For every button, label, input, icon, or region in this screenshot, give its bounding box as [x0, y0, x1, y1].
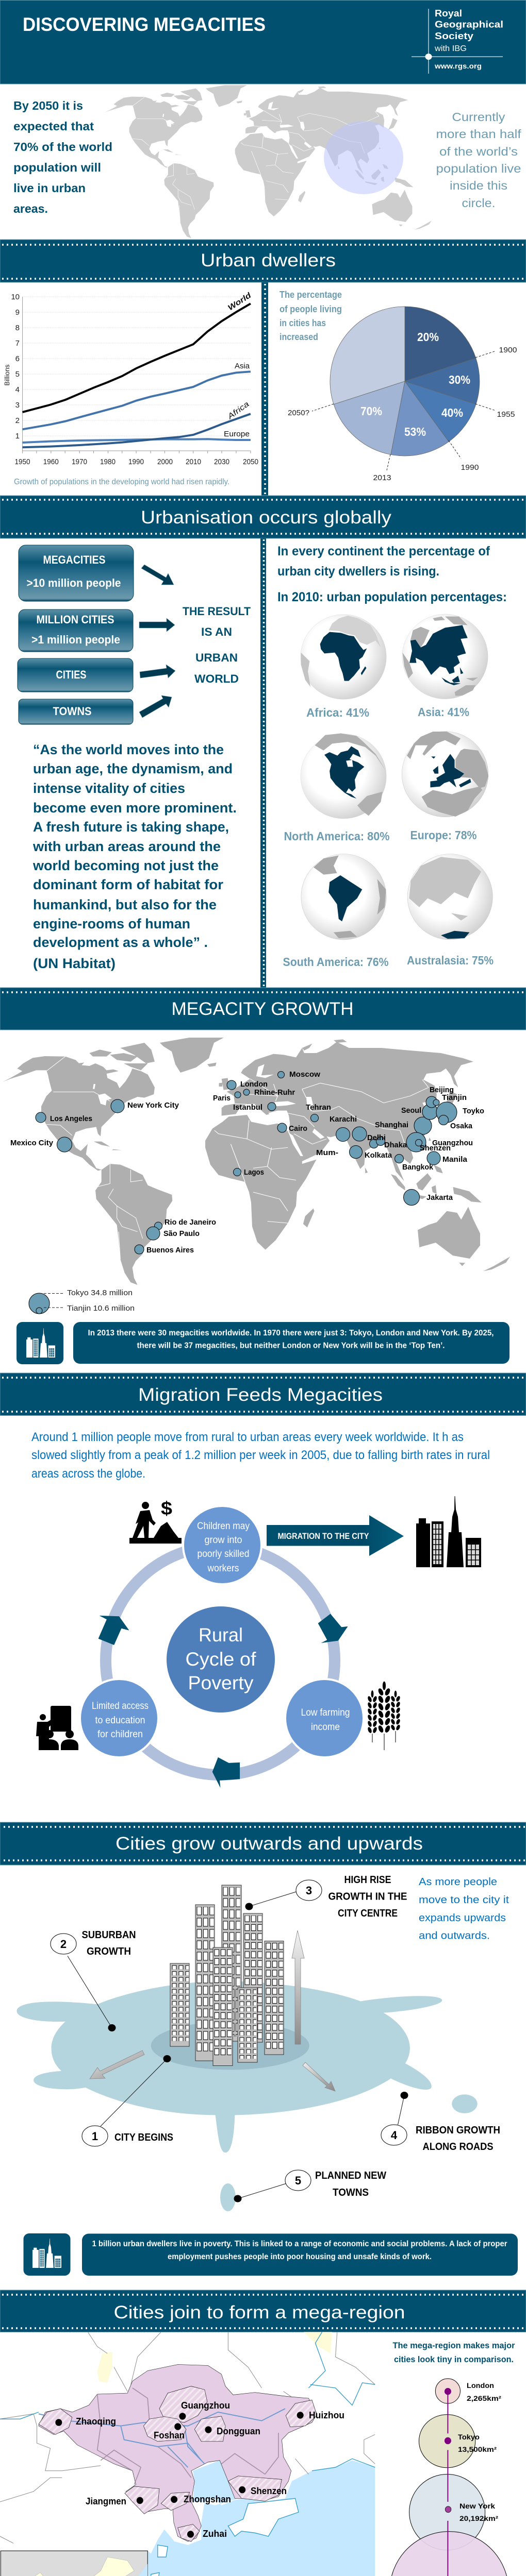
y axis labels: 3	[15, 401, 20, 410]
title: DISCOVERING MEGACITIES	[23, 14, 266, 35]
globe labels: Africa: 41%	[306, 706, 369, 719]
logo: Royal Geographical Society: www.rgs.org	[434, 62, 482, 70]
arrows to urban world	[139, 565, 175, 718]
city labels: Guangzhou	[432, 1139, 473, 1147]
section heading: Urban dwellers	[0, 240, 526, 282]
text: by 2050 statement: By 2050 it is	[13, 99, 83, 112]
icon: wheat	[367, 1682, 401, 1750]
text: rural to urban migration	[31, 1430, 490, 1481]
text: currently more than half: more than half	[436, 127, 521, 141]
text: rural to urban migration: slowed slightly from a peak of 1.2 million per week in 2005, due to falling birth rates in rural	[31, 1448, 490, 1462]
node: limited access to education: for children	[97, 1729, 143, 1740]
x axis labels: 2030	[214, 457, 229, 466]
node: limited access to education	[79, 1678, 159, 1758]
neighbouring land details	[97, 2332, 332, 2383]
city labels: Shenzen	[420, 1144, 451, 1153]
city labels: Seoul	[401, 1106, 421, 1115]
text: every continent: urban city dwellers is rising.	[277, 564, 439, 579]
pie chart: percentage living in cities: 2013	[373, 473, 391, 482]
stage labels: RIBBON GROWTH	[416, 2125, 500, 2136]
icon: teacher and pupils	[36, 1706, 78, 1750]
node: poorly skilled workers: workers	[207, 1563, 239, 1574]
y axis labels: 1	[15, 432, 20, 440]
globe labels: South America: 76%	[283, 955, 389, 969]
comparison circles	[390, 2379, 508, 2576]
city labels: Buenos Aires	[146, 1246, 194, 1255]
city circles	[36, 1072, 457, 1254]
city names	[76, 2400, 344, 2539]
text: rural to urban migration: areas across the globe.	[31, 1467, 145, 1481]
legend: circle sizes	[29, 1289, 135, 1314]
node: limited access to education: Limited access	[92, 1701, 149, 1711]
text: as more people move: expands upwards	[419, 1912, 506, 1924]
text: the result is an urban world	[183, 605, 251, 685]
text: pie chart intro	[280, 290, 342, 342]
text: pie chart intro: The percentage	[280, 290, 342, 300]
box: megacities	[19, 545, 134, 601]
world map with population circle	[104, 85, 432, 238]
box: megacities: >10 million people	[27, 577, 121, 589]
callout: 30 megacities	[73, 1322, 509, 1364]
sea	[147, 2461, 375, 2576]
city labels: Rhine-Ruhr	[254, 1088, 295, 1097]
icon: city skyline	[416, 1496, 481, 1567]
logo: Royal Geographical Society: Geographical	[435, 20, 503, 30]
icon: worker digging: $	[161, 1498, 172, 1519]
box: towns: TOWNS	[53, 705, 92, 718]
centre circle	[167, 1606, 275, 1713]
quote: UN Habitat: urban age, the dynamism, and	[33, 761, 233, 776]
text: the result is an urban world: THE RESULT	[183, 605, 251, 618]
text: currently more than half: circle.	[462, 196, 495, 210]
series labels	[224, 291, 253, 438]
city labels: Lagos	[244, 1168, 264, 1177]
section heading: Urbanisation occurs globally: Urbanisation occurs globally	[141, 507, 392, 528]
globe: Australasia	[407, 854, 492, 940]
text: currently more than half: Currently	[452, 110, 505, 124]
y axis labels: 2	[15, 416, 20, 425]
city labels	[10, 1070, 484, 1255]
arrow: outward growth right	[303, 2062, 335, 2091]
quote: UN Habitat: A fresh future is taking shape,	[33, 819, 229, 835]
node: low farming income	[284, 1678, 365, 1758]
city labels: Rio de Janeiro	[165, 1218, 216, 1227]
section heading: Megacity growth	[0, 988, 526, 1030]
numbered markers: 2	[60, 1938, 67, 1951]
box: megacities: MEGACITIES	[43, 553, 105, 566]
quote: UN Habitat: with urban areas around the	[32, 839, 221, 854]
node: poorly skilled workers: poorly skilled	[197, 1549, 250, 1560]
box: cities	[18, 658, 133, 692]
series labels: Europe	[224, 430, 250, 438]
globe labels: Asia: 41%	[418, 705, 469, 719]
globe labels: Australasia: 75%	[407, 954, 494, 967]
node: poorly skilled workers: Children may	[197, 1521, 250, 1532]
text: as more people move: and outwards.	[419, 1930, 490, 1941]
callout: 1 billion in poverty: employment pushes people into poor housing and unsafe kinds of work.	[168, 2252, 432, 2261]
stage labels: PLANNED NEW	[315, 2170, 386, 2181]
globe labels: North America: 80%	[284, 829, 390, 843]
section heading: Cities join to form a mega-region: Cities join to form a mega-region	[113, 2302, 405, 2323]
text: currently more than half	[436, 110, 521, 210]
text: currently more than half: inside this	[450, 179, 507, 192]
box: million cities	[19, 609, 133, 652]
tower blocks	[170, 1885, 284, 2066]
city labels: Cairo	[289, 1124, 307, 1133]
stage labels: TOWNS	[333, 2187, 369, 2198]
stage labels: GROWTH IN THE	[328, 1891, 407, 1903]
x axis labels: 1960	[43, 457, 59, 466]
city labels: Shanghai	[375, 1121, 408, 1129]
globe: North America	[301, 733, 386, 819]
text: mega-region comparison: The mega-region makes major	[393, 2341, 515, 2350]
logo: Royal Geographical Society: Royal	[435, 8, 462, 19]
city labels: Manila	[442, 1155, 468, 1164]
diagram: city growth	[17, 1874, 500, 2211]
y axis labels: 5	[15, 370, 20, 379]
y axis labels: 6	[15, 354, 20, 363]
chart caption: Growth of populations in the developing world had risen rapidly.	[14, 478, 229, 486]
stage labels: SUBURBAN	[81, 1929, 136, 1941]
text: mega-region comparison: cities look tiny in comparison.	[394, 2354, 514, 2364]
y axis labels	[11, 293, 20, 440]
city labels: New York City	[127, 1101, 179, 1110]
globe labels	[283, 705, 494, 969]
text: by 2050 statement: expected that	[13, 120, 94, 133]
pie chart: percentage living in cities: 1900	[499, 346, 517, 354]
y axis labels: 10	[11, 293, 20, 301]
node: low farming income: Low farming	[301, 1707, 350, 1718]
hatched city areas	[39, 2386, 317, 2541]
city labels: Kolkata	[365, 1151, 392, 1160]
text: as more people move	[419, 1876, 509, 1941]
callout: 1 billion in poverty	[82, 2234, 518, 2276]
quote: UN Habitat: development as a whole” .	[33, 935, 208, 950]
text: by 2050 statement	[13, 99, 112, 215]
arrow: migration to the city: MIGRATION TO THE CITY	[277, 1531, 369, 1541]
text: by 2050 statement: areas.	[13, 202, 48, 215]
city labels: Dhaka	[384, 1141, 407, 1149]
comparison circles: Tokyo	[458, 2433, 480, 2441]
city labels: Moscow	[289, 1070, 320, 1079]
arrow: outward growth left	[90, 2050, 144, 2079]
legend: circle sizes: Tianjin 10.6 million	[67, 1304, 135, 1313]
region rivers and borders	[97, 2388, 278, 2485]
stage labels: HIGH RISE	[344, 1874, 391, 1886]
borders	[0, 2332, 375, 2543]
city labels: Mum-	[316, 1148, 338, 1157]
section heading: Cities grow outwards and upwards: Cities grow outwards and upwards	[116, 1834, 423, 1854]
line: World	[23, 303, 251, 412]
x axis labels: 2050	[243, 457, 258, 466]
stage labels	[81, 1874, 500, 2198]
y axis labels: 4	[15, 385, 20, 394]
quote: UN Habitat: engine-rooms of human	[33, 916, 190, 931]
quote: UN Habitat	[32, 742, 237, 971]
callout: 30 megacities: In 2013 there were 30 megacities worldwide. In 1970 there were just 3: Tokyo, London and New York. By 2025,	[88, 1329, 494, 1337]
node: limited access to education: to education	[95, 1715, 145, 1726]
text: pie chart intro: of people living	[280, 304, 342, 314]
text: every continent: In every continent the percentage of	[277, 544, 490, 558]
globes	[301, 614, 492, 940]
city labels: Delhi	[367, 1133, 386, 1142]
comparison circles: 20,192km²	[459, 2514, 498, 2522]
city labels: Tehran	[306, 1103, 331, 1112]
quote: UN Habitat: become even more prominent.	[33, 800, 237, 816]
series labels: Africa	[225, 400, 251, 421]
city labels: Istanbul	[233, 1103, 262, 1112]
divider	[260, 538, 266, 988]
city names: Huizhou	[309, 2410, 344, 2420]
centre circle: Cycle of	[186, 1649, 256, 1670]
globe labels: Europe: 78%	[410, 828, 476, 842]
section heading: Urban dwellers: Urban dwellers	[201, 250, 336, 270]
pie chart: percentage living in cities: 1955	[497, 410, 515, 419]
city names: Dongguan	[217, 2426, 260, 2436]
stage labels: ALONG ROADS	[423, 2141, 493, 2153]
callout: 1 billion in poverty: 1 billion urban dwellers live in poverty. This is linked to a range of economic and social problems. A lack of proper	[92, 2240, 507, 2248]
quote: UN Habitat: “As the world moves into the	[33, 742, 224, 757]
text: the result is an urban world: URBAN	[195, 651, 238, 664]
icon: worker digging	[129, 1498, 182, 1544]
pie chart: percentage living in cities: 2050?	[288, 409, 309, 417]
city names: Foshan	[154, 2430, 185, 2441]
text: every continent	[277, 544, 507, 604]
box: towns	[19, 699, 133, 724]
city labels: Karachi	[330, 1115, 357, 1124]
text: currently more than half: of the world’s	[439, 145, 518, 158]
legend: circle sizes: Tokyo 34.8 million	[67, 1289, 133, 1297]
text: the result is an urban world: WORLD	[194, 672, 239, 685]
text: as more people move: move to the city it	[419, 1894, 509, 1906]
line: Africa	[23, 414, 251, 447]
city labels: Bangkok	[402, 1163, 434, 1172]
box: million cities: >1 million people	[31, 633, 120, 646]
x axis labels: 1990	[128, 457, 144, 466]
city labels: Jakarta	[426, 1193, 453, 1202]
box: million cities: MILLION CITIES	[36, 613, 114, 626]
section heading: Megacity growth: MEGACITY GROWTH	[171, 999, 354, 1019]
city area blob	[17, 1981, 478, 2153]
series labels: World	[226, 291, 253, 312]
quote: UN Habitat: dominant form of habitat for	[33, 877, 224, 892]
globe: Africa	[301, 615, 386, 699]
city names: Shenzen	[251, 2486, 287, 2496]
stage labels: CITY CENTRE	[338, 1908, 398, 1919]
pie chart: percentage living in cities	[288, 307, 517, 482]
quote: UN Habitat: humankind, but also for the	[33, 897, 217, 912]
section heading: Cities join to form a mega-region	[0, 2290, 526, 2332]
map: Pearl River Delta	[0, 2332, 375, 2576]
new town	[220, 2183, 236, 2211]
logo: Royal Geographical Society: Society	[435, 31, 473, 41]
stage labels: GROWTH	[87, 1946, 131, 1957]
diagram: rural cycle of poverty	[79, 1505, 365, 1788]
line: Europe	[23, 439, 251, 443]
globe: Asia	[402, 614, 488, 699]
ring arrows	[98, 1614, 348, 1788]
arrow: upward growth	[292, 1930, 304, 2044]
centre circle: Rural	[199, 1624, 243, 1646]
city dots	[55, 2412, 304, 2538]
text: by 2050 statement: population will	[13, 161, 101, 174]
x axis labels: 1980	[100, 457, 116, 466]
globe: Europe	[402, 732, 488, 817]
city labels: Los Angeles	[50, 1114, 92, 1123]
numbered markers: 3	[306, 1884, 312, 1897]
text: pie chart intro: increased	[280, 332, 318, 342]
city labels: Mexico City	[10, 1139, 54, 1147]
node: poorly skilled workers: grow into	[204, 1535, 242, 1546]
logo: Royal Geographical Society	[412, 8, 503, 74]
text: mega-region comparison	[393, 2341, 515, 2364]
numbered markers: 1	[92, 2130, 98, 2143]
comparison circles: 2,265km²	[467, 2394, 501, 2402]
city labels: London	[240, 1080, 268, 1089]
text: currently more than half: population live	[436, 162, 521, 175]
centre circle: Poverty	[188, 1672, 254, 1693]
pie chart: percentage living in cities: 1990	[461, 463, 479, 472]
comparison circles: 13,500km²	[458, 2445, 497, 2453]
text: rural to urban migration: Around 1 million people move from rural to urban areas every week worldwide. It h as	[31, 1430, 464, 1444]
quote: UN Habitat: intense vitality of cities	[33, 781, 185, 796]
circle: half of world population	[324, 121, 403, 194]
section heading: Migration feeds megacities	[0, 1373, 526, 1416]
inset map: China	[1, 2551, 147, 2576]
text: every continent: In 2010: urban population percentages:	[277, 590, 507, 604]
x axis labels: 2000	[157, 457, 173, 466]
line: Asia	[23, 371, 251, 429]
pie chart: percentage living in cities: 20%	[417, 330, 439, 344]
y axis title: Billions	[3, 364, 11, 386]
mega-region	[39, 2364, 317, 2541]
numbered markers: 5	[295, 2174, 301, 2187]
stage labels: CITY BEGINS	[114, 2132, 173, 2143]
comparison circles: London	[467, 2381, 494, 2389]
city labels: Tianjin	[442, 1093, 467, 1102]
x axis labels: 1970	[72, 457, 87, 466]
text: by 2050 statement: 70% of the world	[13, 140, 112, 154]
text: pie chart intro: in cities has	[280, 318, 326, 328]
city labels: Osaka	[450, 1122, 473, 1130]
text: by 2050 statement: live in urban	[13, 181, 86, 195]
world map: megacities	[3, 1038, 510, 1285]
globe: South America	[301, 854, 386, 940]
section heading: Cities grow outwards and upwards	[0, 1822, 526, 1865]
x axis labels: 2010	[186, 457, 201, 466]
city names: Guangzhou	[181, 2400, 230, 2411]
comparison circles: New York	[459, 2502, 495, 2510]
city labels: Toyko	[463, 1107, 484, 1115]
section heading: Urbanisation occurs globally	[0, 496, 526, 538]
city names: Zhongshan	[184, 2494, 231, 2504]
header banner	[0, 0, 526, 84]
divider	[261, 282, 268, 496]
line chart: population in billions	[3, 291, 258, 466]
pie chart: percentage living in cities: 40%	[441, 406, 463, 419]
numbered markers	[51, 1880, 407, 2191]
city labels: São Paulo	[163, 1229, 200, 1238]
city names: Jiangmen	[86, 2496, 126, 2506]
box: cities: CITIES	[56, 668, 87, 681]
y axis labels: 7	[15, 339, 20, 348]
pie chart: percentage living in cities: 30%	[449, 373, 470, 386]
text: the result is an urban world: IS AN	[201, 625, 232, 638]
arrow: migration to the city	[267, 1515, 404, 1556]
section heading: Migration feeds megacities: Migration Feeds Megacities	[138, 1385, 383, 1405]
y axis labels: 8	[15, 324, 20, 332]
x axis labels: 1950	[14, 457, 30, 466]
x axis labels	[14, 457, 258, 466]
quote: UN Habitat: world becoming not just the	[32, 858, 219, 873]
pointers	[68, 1892, 404, 2199]
city names: Zuhai	[203, 2529, 227, 2539]
node: low farming income: income	[311, 1722, 340, 1733]
icon: city	[24, 2233, 70, 2276]
city names: Zhaoqing	[76, 2416, 116, 2427]
pie chart: percentage living in cities: 53%	[404, 425, 426, 438]
city labels: Beijing	[430, 1086, 454, 1094]
node: poorly skilled workers	[182, 1505, 262, 1585]
city labels: Paris	[213, 1094, 231, 1103]
series labels: Asia	[235, 362, 250, 370]
icon: city	[17, 1322, 63, 1364]
numbered markers: 4	[391, 2129, 398, 2142]
logo: Royal Geographical Society: with IBG	[434, 44, 467, 53]
callout: 30 megacities: there will be 37 megacities, but neither London or New York will be in the ‘Top Ten’.	[137, 1342, 445, 1350]
y axis labels: 9	[15, 308, 20, 317]
text: as more people move: As more people	[419, 1876, 497, 1888]
pie chart: percentage living in cities: 70%	[360, 404, 382, 418]
quote: UN Habitat: (UN Habitat)	[33, 956, 116, 971]
